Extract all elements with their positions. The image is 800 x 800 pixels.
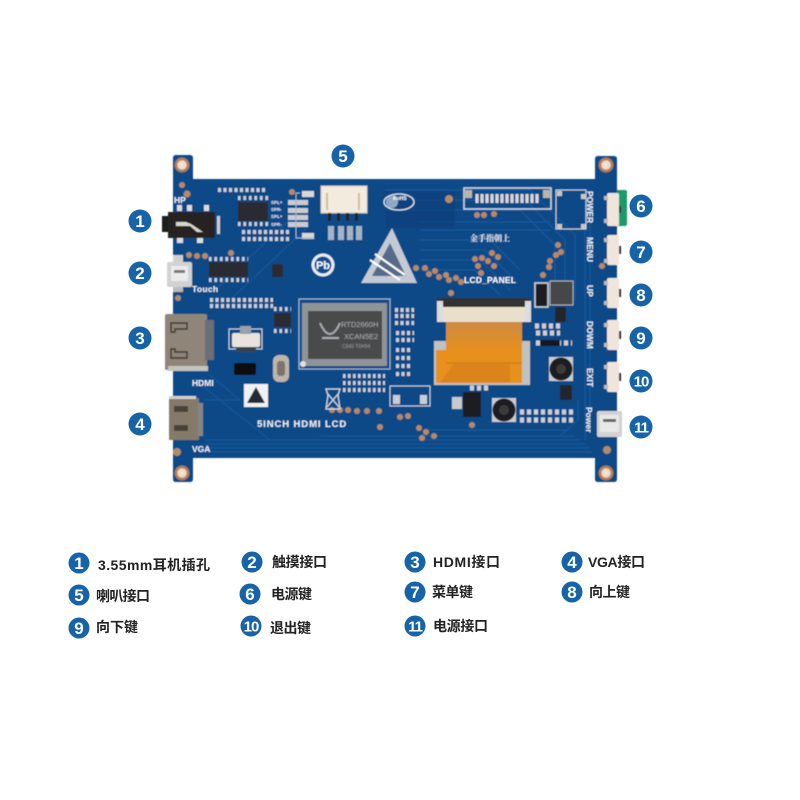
- legend item 7: [404, 582, 473, 602]
- legend item 6: 6: [245, 585, 255, 604]
- legend item 2: [242, 552, 327, 572]
- callout numbers around the board: 7: [636, 243, 646, 262]
- recycle mark: [326, 389, 340, 409]
- main chip: C849 T6H94: [342, 344, 370, 350]
- legend item 6: [240, 584, 312, 604]
- legend item 1: 3.55mm耳机插孔: [98, 557, 210, 573]
- legend item 2: 触摸接口: [272, 554, 327, 570]
- silkscreen labels: 金手指朝上: [470, 233, 510, 243]
- legend item 4: 4: [567, 553, 577, 572]
- silkscreen labels: LCD_PANEL: [464, 275, 516, 285]
- legend item 3: 3: [410, 553, 420, 572]
- legend item 7: 7: [410, 583, 420, 602]
- legend item 7: 菜单键: [432, 584, 473, 600]
- RoHS mark: [384, 194, 414, 210]
- legend item 8: 8: [567, 583, 577, 602]
- silkscreen labels: SPR-: [271, 222, 282, 227]
- legend item 9: [68, 618, 138, 638]
- silkscreen labels: SPL+: [271, 200, 283, 205]
- legend item 1: 1: [74, 554, 84, 573]
- callout numbers around the board: 3: [135, 329, 145, 348]
- legend item 11: 电源接口: [433, 618, 488, 634]
- green tab behind power button: [612, 190, 627, 226]
- main chip: XCAN5E2: [344, 332, 378, 341]
- legend item 1: [68, 552, 210, 574]
- callout numbers around the board: [128, 144, 652, 438]
- inductors: [492, 357, 573, 422]
- silkscreen labels: SPR-: [271, 207, 282, 212]
- black pad: [234, 363, 256, 375]
- legend item 10: 10: [244, 618, 259, 636]
- legend item 9: 向下键: [96, 619, 138, 635]
- legend item 10: [240, 616, 311, 636]
- legend: [68, 552, 645, 638]
- legend item 11: [404, 616, 488, 636]
- mounting holes: [174, 158, 614, 480]
- legend item 4: [562, 552, 645, 572]
- speaker pads: [288, 191, 314, 239]
- legend item 5: [68, 584, 150, 606]
- speaker connector: [321, 186, 367, 240]
- silkscreen labels: Touch: [192, 284, 218, 294]
- ESD triangle: [361, 228, 417, 283]
- vias: [173, 182, 611, 456]
- legend item 10: 退出键: [270, 620, 311, 636]
- silkscreen labels: UP: [585, 285, 595, 297]
- crystal: [273, 355, 289, 382]
- Pb-free mark: Pb: [316, 260, 330, 272]
- touch micro USB: [167, 255, 192, 292]
- SMD parts: [0, 190, 575, 420]
- legend item 8: [562, 582, 630, 602]
- copper traces: [195, 190, 592, 452]
- VGA connector: [169, 396, 203, 440]
- silkscreen labels: VGA: [192, 444, 210, 454]
- white FPC socket: [229, 326, 262, 352]
- circuit board: [0, 155, 627, 482]
- callout numbers around the board: 1: [135, 212, 145, 231]
- board body: [173, 155, 617, 482]
- power micro USB: [597, 411, 622, 437]
- callout numbers around the board: 2: [135, 264, 145, 283]
- silkscreen labels: MENU: [585, 237, 595, 262]
- silkscreen labels: 5INCH HDMI LCD: [257, 419, 347, 430]
- ESD label: [244, 384, 268, 407]
- legend item 5: 5: [74, 586, 84, 605]
- silkscreen labels: [174, 191, 595, 454]
- callout numbers around the board: 4: [135, 415, 145, 434]
- legend item 5: 喇叭接口: [96, 588, 150, 604]
- main chip: [299, 299, 390, 369]
- legend item 11: 11: [408, 618, 423, 636]
- touch panel switch footprint: [556, 190, 586, 229]
- silkscreen labels: POWER: [585, 191, 595, 223]
- Pb-free mark: [312, 254, 334, 276]
- callout numbers around the board: 5: [338, 147, 348, 166]
- legend item 9: 9: [74, 619, 84, 638]
- small chips: [209, 202, 291, 327]
- legend item 4: VGA接口: [588, 554, 645, 570]
- HDMI connector: [165, 314, 214, 371]
- callout numbers around the board: 9: [636, 329, 646, 348]
- silkscreen labels: SPL+: [271, 214, 283, 219]
- callout numbers around the board: 10: [634, 374, 649, 390]
- silkscreen labels: Power: [584, 407, 594, 433]
- connector outline with pads: [390, 386, 430, 406]
- FPC top connector: [464, 188, 551, 209]
- legend item 3: [404, 552, 500, 572]
- callout numbers around the board: 6: [636, 197, 646, 216]
- legend item 3: HDMI接口: [433, 554, 500, 570]
- RoHS mark: RoHS: [393, 196, 407, 202]
- silkscreen labels: EXIT: [585, 368, 595, 388]
- callout numbers around the board: 8: [636, 286, 646, 305]
- headphone jack: [162, 205, 220, 243]
- right side buttons: [604, 193, 621, 392]
- silkscreen labels: HP: [174, 195, 186, 205]
- silkscreen labels: HDMI: [192, 378, 214, 388]
- power parts: [452, 281, 573, 417]
- callout numbers around the board: 11: [634, 420, 649, 436]
- legend item 8: 向上键: [589, 584, 630, 600]
- legend item 6: 电源键: [271, 586, 312, 602]
- FPC and orange flex cable: [434, 298, 531, 385]
- legend item 2: 2: [247, 553, 257, 572]
- silkscreen labels: DOWM: [585, 321, 595, 349]
- main chip: RTD2660H: [341, 320, 378, 329]
